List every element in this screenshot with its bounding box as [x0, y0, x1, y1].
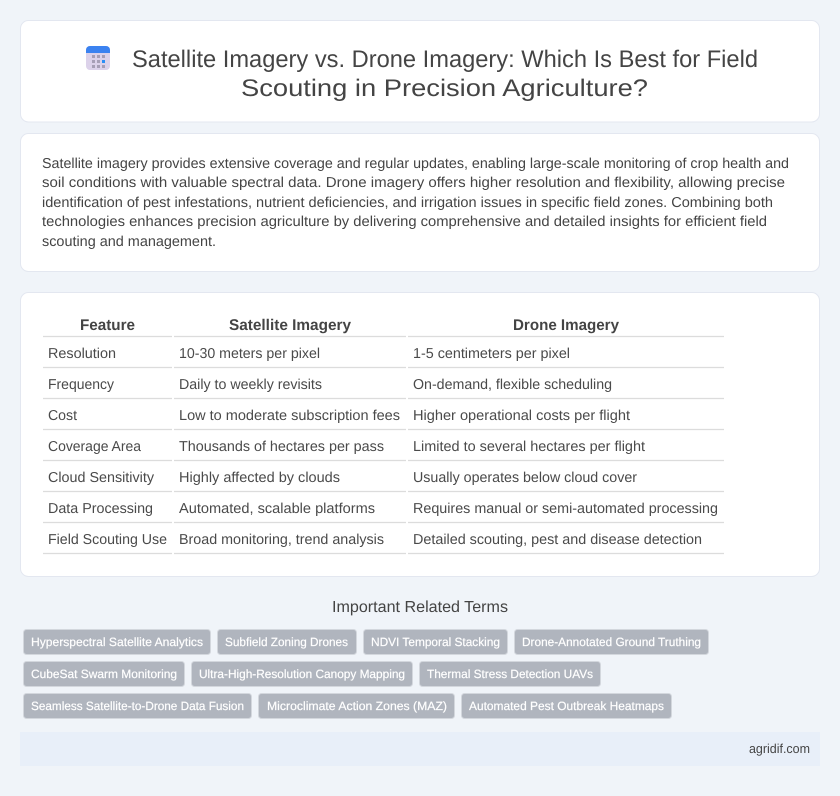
row: frequency: On-demand, flexible scheduling [413, 377, 612, 393]
table header: Drone Imagery [513, 317, 619, 334]
row: resolution [48, 346, 570, 362]
row: coverage area [48, 439, 645, 455]
row: frequency [48, 377, 612, 393]
row: field scouting use: Detailed scouting, pest and disease detection [413, 532, 702, 548]
row: frequency: Frequency [48, 377, 115, 393]
related term tags: Automated Pest Outbreak Heatmaps [469, 699, 664, 713]
heading: important related terms: Important Related Terms [332, 599, 508, 616]
related term tags: CubeSat Swarm Monitoring [31, 667, 177, 681]
title: Satellite Imagery vs. Drone Imagery: Which Is Best for Field [132, 46, 758, 73]
panel: summary paragraph: Satellite imagery provides extensive coverage and regular updates, enabling large-scale monitoring of crop health and [42, 156, 789, 172]
row: cloud sensitivity: Cloud Sensitivity [48, 470, 155, 486]
panel: header [20, 20, 820, 122]
related term tags: NDVI Temporal Stacking [371, 635, 500, 649]
related term tags [24, 630, 708, 718]
footer [20, 732, 820, 766]
panel: summary paragraph [20, 134, 820, 272]
table header: Feature [80, 317, 135, 334]
row: data processing: Automated, scalable platforms [179, 501, 375, 517]
table header [80, 317, 619, 334]
related term tags: Microclimate Action Zones (MAZ) [267, 699, 447, 713]
row: field scouting use [48, 532, 702, 548]
panel: comparison table [20, 292, 820, 576]
row: cost: Low to moderate subscription fees [179, 408, 400, 424]
row: coverage area: Limited to several hectares per flight [413, 439, 645, 455]
panel: summary paragraph: soil conditions with valuable spectral data. Drone imagery offers higher resolution and flexibility, allowing precise [42, 175, 785, 191]
panel: summary paragraph: technologies enhances precision agriculture by delivering comprehensive and detailed insights for efficient field [42, 214, 767, 230]
row: cost: Cost [48, 408, 77, 424]
related term tags: Hyperspectral Satellite Analytics [31, 635, 203, 649]
row: data processing: Requires manual or semi-automated processing [413, 501, 718, 517]
row: coverage area: Thousands of hectares per pass [179, 439, 384, 455]
row: cost: Higher operational costs per flight [413, 408, 630, 424]
row: resolution: 1-5 centimeters per pixel [413, 346, 570, 362]
row: cloud sensitivity: Highly affected by clouds [179, 470, 340, 486]
row: data processing [48, 501, 718, 517]
footer: agridif.com [749, 741, 810, 756]
panel: summary paragraph: scouting and management. [42, 234, 216, 250]
related term tags: Drone-Annotated Ground Truthing [522, 635, 701, 649]
row: frequency: Daily to weekly revisits [179, 377, 322, 393]
row: field scouting use: Broad monitoring, trend analysis [179, 532, 384, 548]
related term tags: Thermal Stress Detection UAVs [427, 667, 593, 681]
title: Scouting in Precision Agriculture? [241, 75, 648, 102]
table header: Satellite Imagery [229, 317, 351, 334]
row: cloud sensitivity [48, 470, 637, 486]
row: cloud sensitivity: Usually operates below cloud cover [413, 470, 637, 486]
row: resolution: Resolution [48, 346, 116, 362]
related term tags: Seamless Satellite-to-Drone Data Fusion [31, 699, 244, 713]
row: coverage area: Coverage Area [48, 439, 141, 455]
related term tags: Subfield Zoning Drones [225, 635, 348, 649]
row: data processing: Data Processing [48, 501, 153, 517]
row: cost [48, 408, 630, 424]
related term tags: Ultra-High-Resolution Canopy Mapping [199, 667, 405, 681]
panel: summary paragraph: identification of pest infestations, nutrient deficiencies, and irrigation issues in specific field zones. Combining both [42, 195, 773, 211]
title [132, 46, 758, 102]
row: field scouting use: Field Scouting Use [48, 532, 167, 548]
row: resolution: 10-30 meters per pixel [179, 346, 320, 362]
icon: calendar [86, 46, 110, 70]
